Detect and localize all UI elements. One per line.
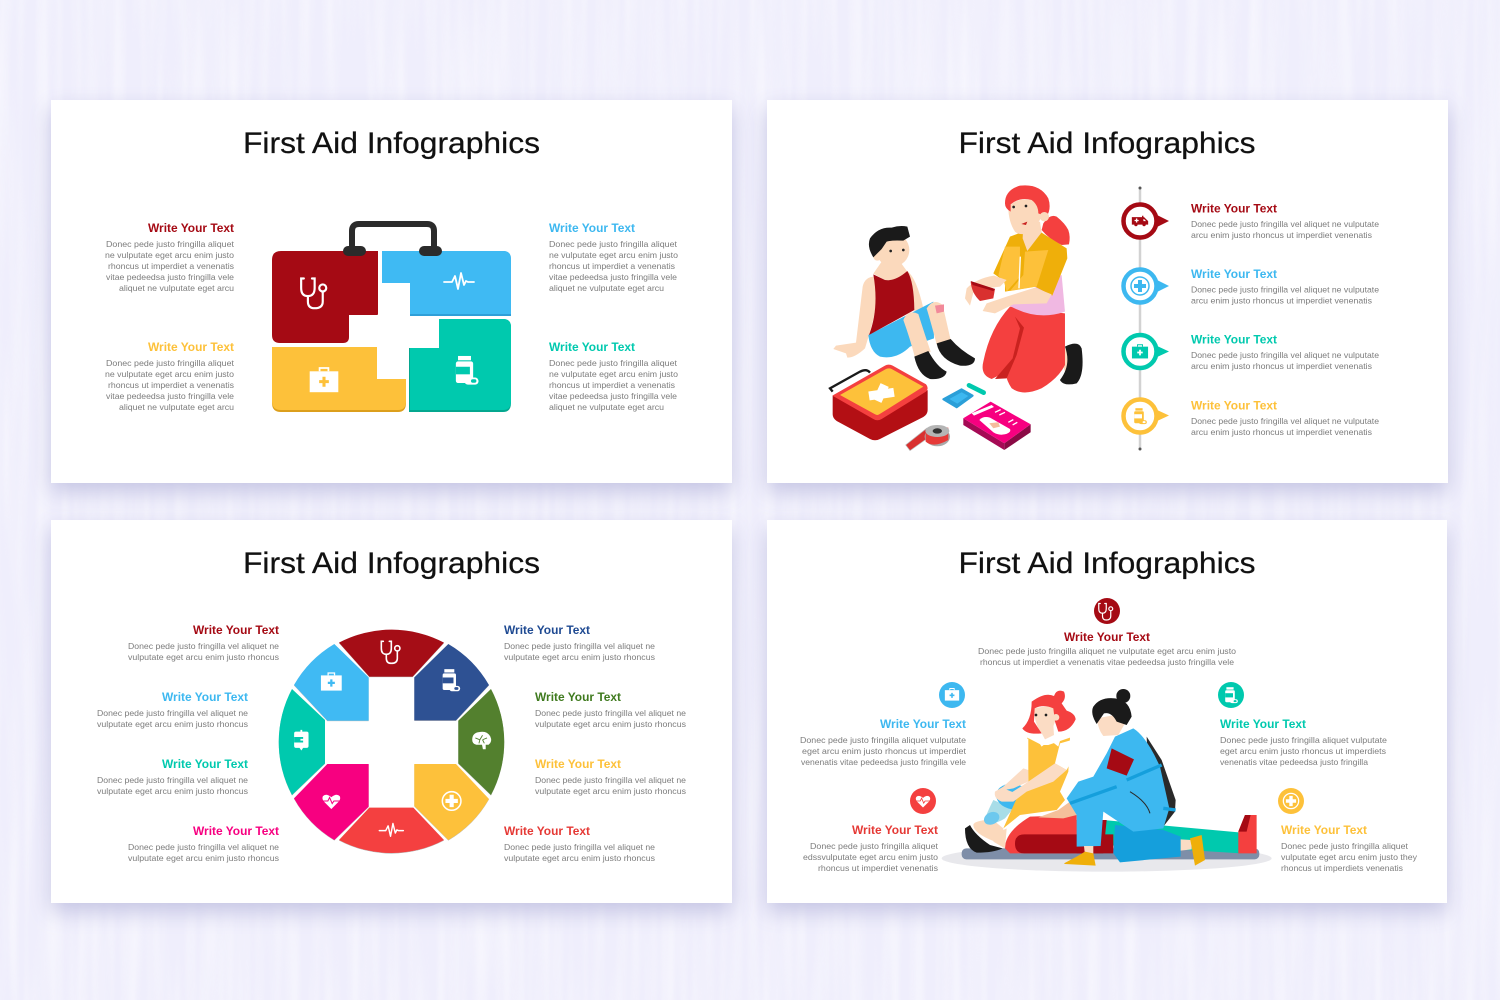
segment: brain [458,689,504,795]
text block: red: Donec pede justo fringilla aliquet [106,239,235,249]
first aider in blue [1038,689,1205,866]
right text 4: vulputate eget arcu enim justo rhoncus [504,853,655,863]
text block: blue: aliquet ne vulputate eget arcu [549,283,664,293]
text block: teal: eget arcu enim justo rhoncus ut imperdiets [1220,746,1386,756]
title: First Aid Infographics [243,547,540,580]
text block: teal: vitae pedeedsa justo fringilla vele [549,391,677,401]
text block: blue: Write Your Text [880,719,966,731]
text block: teal [1220,719,1387,767]
text block: yellow: aliquet ne vulputate eget arcu [119,402,234,412]
timeline text 3 [1191,334,1379,371]
text block: teal: Donec pede justo fringilla aliquet [549,358,678,368]
segment: pulse [339,808,444,853]
text block: yellow: Donec pede justo fringilla aliquet [106,358,235,368]
text block: red: rhoncus ut imperdiet venenatis [818,863,938,873]
timeline text 4: Donec pede justo fringilla vel aliquet ne vulputate [1191,416,1379,426]
right text 1: Write Your Text [504,625,590,637]
marker: plus [1124,270,1169,302]
text block: yellow: vitae pedeedsa justo fringilla vele [106,391,234,401]
right text 4: Donec pede justo fringilla vel aliquet ne [504,842,655,852]
text block: blue: Donec pede justo fringilla aliquet vulputate [800,735,966,745]
segment: plus [414,764,489,840]
text block: teal: ne vulputate eget arcu enim justo [549,369,678,379]
left text 1 [128,625,279,662]
boy [833,226,975,379]
patient [965,815,1257,853]
timeline text 4: Write Your Text [1191,400,1277,412]
timeline line [1138,186,1142,450]
text block: yellow: rhoncus ut imperdiets venenatis [1281,863,1403,873]
timeline text 3: arcu enim justo rhoncus ut imperdiet venenatis [1191,361,1372,371]
right text 4: Write Your Text [504,826,590,838]
text block: blue: ne vulputate eget arcu enim justo [549,250,678,260]
right text 2: Donec pede justo fringilla vel aliquet ne [535,708,686,718]
icon: heart badge [910,788,936,814]
left text 4 [128,826,279,863]
timeline text 1: arcu enim justo rhoncus ut imperdiet venenatis [1191,230,1372,240]
right text 3 [535,759,686,796]
timeline text 1: Donec pede justo fringilla vel aliquet ne vulputate [1191,219,1379,229]
icon: kit badge [939,682,965,708]
first aider in yellow [995,691,1077,828]
mask and bag [982,781,1033,827]
text block: red: Write Your Text [148,223,234,235]
text block: top [978,632,1236,667]
timeline text 2: arcu enim justo rhoncus ut imperdiet venenatis [1191,296,1372,306]
text block: red: Write Your Text [852,825,938,837]
text block: teal: Write Your Text [549,342,635,354]
timeline text 3: Donec pede justo fringilla vel aliquet ne vulputate [1191,350,1379,360]
plaster box [963,402,1031,450]
piece: blue pulse [382,251,511,316]
piece: yellow kit [272,347,406,412]
text block: yellow [1281,825,1418,873]
text block: red: aliquet ne vulputate eget arcu [119,283,234,293]
right text 1: vulputate eget arcu enim justo rhoncus [504,652,655,662]
left text 3 [97,759,248,796]
icon: stethoscope badge [1094,598,1120,624]
panel: circular cross diagram [51,520,732,903]
icon: plus badge [1278,788,1304,814]
text block: blue [549,223,678,293]
ground [942,845,1272,872]
icon: bottle badge [1218,682,1244,708]
timeline text 4 [1191,400,1379,437]
left text 2 [97,692,248,729]
segment: iv bag [279,689,325,795]
panel: resuscitation [767,520,1447,903]
text block: top: rhoncus ut imperdiet a venenatis vitae pedeedsa justo fringilla vele [980,657,1234,667]
marker: kit [1124,335,1169,368]
text block: yellow: ne vulputate eget arcu enim justo [105,369,234,379]
marker: ambulance [1124,204,1169,238]
text block: yellow: vulputate eget arcu enim justo they [1281,852,1418,862]
right text 3: Write Your Text [535,759,621,771]
segment: heart [294,764,369,840]
chart: medical kit puzzle [272,224,511,412]
text block: yellow [105,342,235,412]
text block: top: Donec pede justo fringilla aliquet ne vulputate eget arcu enim justo [978,646,1236,656]
woman [965,185,1083,392]
text block: red [803,825,939,873]
left text 1: Write Your Text [193,625,279,637]
right text 1: Donec pede justo fringilla vel aliquet ne [504,641,655,651]
text block: yellow: Write Your Text [148,342,234,354]
left text 3: Write Your Text [162,759,248,771]
text block: red: ne vulputate eget arcu enim justo [105,250,234,260]
dressings [943,385,984,407]
timeline text 2 [1191,269,1379,306]
text block: blue: eget arcu enim justo rhoncus ut imperdiet [802,746,967,756]
piece: red stethoscope [272,251,378,343]
text block: red: rhoncus ut imperdiet a venenatis [108,261,234,271]
timeline text 1: Write Your Text [1191,204,1277,216]
text block: blue: venenatis vitae pedeedsa justo fringilla vele [801,757,966,767]
text block: red [105,223,235,293]
piece: teal bottle [409,319,511,412]
text block: blue: rhoncus ut imperdiet a venenatis [549,261,675,271]
right text 1 [504,625,655,662]
timeline text 4: arcu enim justo rhoncus ut imperdiet venenatis [1191,427,1372,437]
text block: red: vitae pedeedsa justo fringilla vele [106,272,234,282]
timeline text 3: Write Your Text [1191,334,1277,346]
text block: blue [800,719,967,767]
panel: patient care timeline [767,100,1448,483]
segment: kit [294,644,369,721]
illustration: woman treating boy [830,185,1083,451]
right text 4 [504,826,655,863]
text block: red: edssvulputate eget arcu enim justo [803,852,938,862]
timeline text 2: Donec pede justo fringilla vel aliquet ne vulputate [1191,284,1379,294]
text block: teal: rhoncus ut imperdiet a venenatis [549,380,675,390]
right text 3: vulputate eget arcu enim justo rhoncus [535,786,686,796]
left text 1: Donec pede justo fringilla vel aliquet ne [128,641,279,651]
panel: first aid kit [51,100,732,483]
left text 3: Donec pede justo fringilla vel aliquet ne [97,775,248,785]
right text 3: Donec pede justo fringilla vel aliquet ne [535,775,686,785]
text block: teal: venenatis vitae pedeedsa justo fringilla [1220,757,1368,767]
text block: blue: vitae pedeedsa justo fringilla vele [549,272,677,282]
left text 4: Donec pede justo fringilla vel aliquet ne [128,842,279,852]
text block: blue: Write Your Text [549,223,635,235]
text block: teal: Donec pede justo fringilla aliquet vulputate [1220,735,1387,745]
segment: stethoscope [339,630,444,677]
chart: segmented wheel [279,630,504,853]
text block: top: Write Your Text [1064,632,1150,644]
left text 4: Write Your Text [193,826,279,838]
text block: red: Donec pede justo fringilla aliquet [810,841,939,851]
left text 3: vulputate eget arcu enim justo rhoncus [97,786,248,796]
right text 2 [535,692,686,729]
text block: blue: Donec pede justo fringilla aliquet [549,239,678,249]
right text 2: vulputate eget arcu enim justo rhoncus [535,719,686,729]
tape roll [906,425,950,451]
title: First Aid Infographics [958,547,1256,580]
illustration: CPR scene [942,689,1272,872]
left text 2: Write Your Text [162,692,248,704]
left text 2: Donec pede justo fringilla vel aliquet ne [97,708,248,718]
text block: teal: Write Your Text [1220,719,1306,731]
left text 2: vulputate eget arcu enim justo rhoncus [97,719,248,729]
title: First Aid Infographics [958,127,1256,160]
text block: yellow: Write Your Text [1281,825,1367,837]
handle [343,224,442,256]
text block: yellow: Donec pede justo fringilla aliquet [1281,841,1409,851]
left text 4: vulputate eget arcu enim justo rhoncus [128,853,279,863]
first aid kit [830,365,928,440]
text block: yellow: rhoncus ut imperdiet a venenatis [108,380,234,390]
title: First Aid Infographics [243,127,540,160]
segment: bottle [414,644,489,720]
right text 2: Write Your Text [535,692,621,704]
left text 1: vulputate eget arcu enim justo rhoncus [128,652,279,662]
timeline text 1 [1191,204,1379,240]
timeline text 2: Write Your Text [1191,269,1277,281]
marker: bottle [1124,400,1169,432]
text block: teal [549,342,678,412]
text block: teal: aliquet ne vulputate eget arcu [549,402,664,412]
